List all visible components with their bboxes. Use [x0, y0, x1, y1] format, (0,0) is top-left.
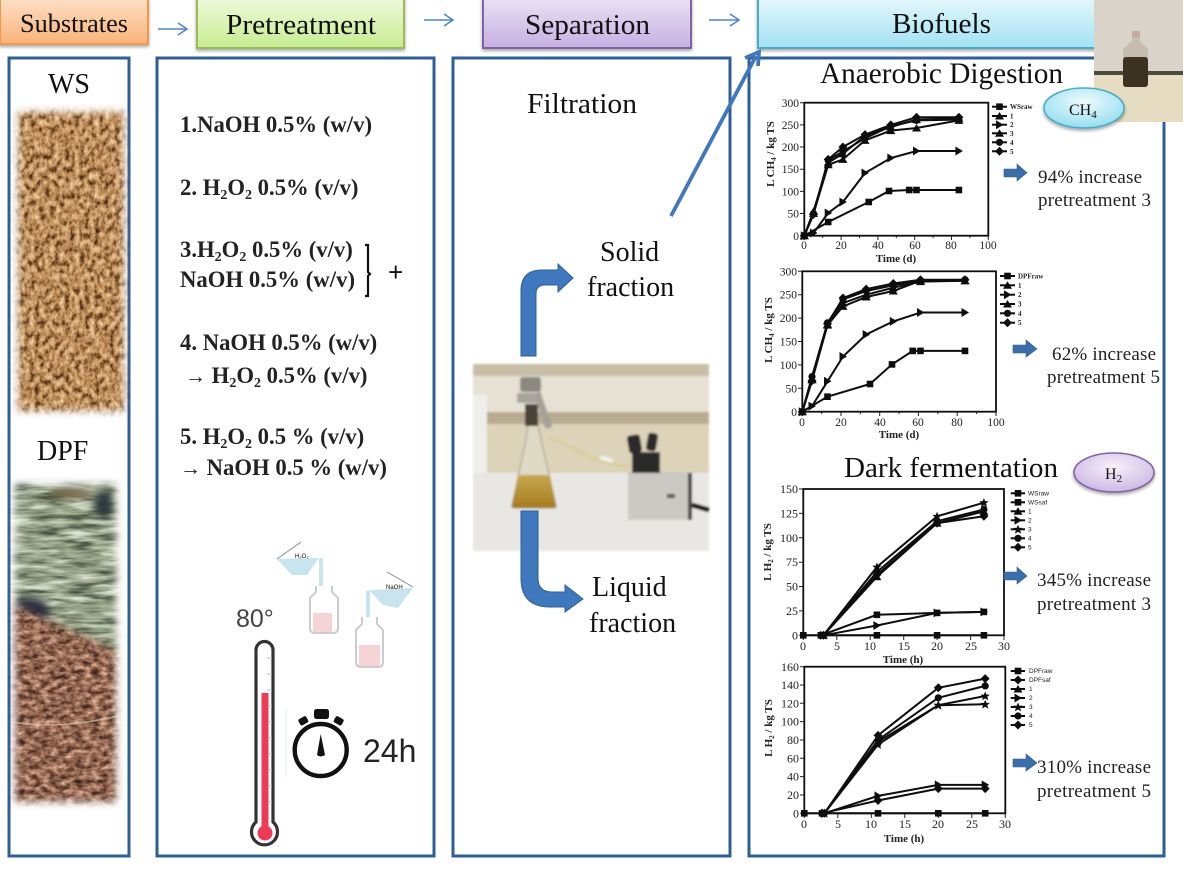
icon: beaker pouring H2O2	[277, 542, 338, 633]
callout: 94% increase	[1038, 167, 1151, 211]
chart: methane from DPF: 200	[780, 313, 797, 325]
chart: methane from WS: Time (d)	[876, 253, 917, 265]
icon: stopwatch	[286, 708, 347, 777]
chart: hydrogen from WS: 1	[1028, 508, 1032, 516]
arrow: callout 2	[1013, 340, 1037, 357]
header: Separation	[483, 0, 691, 48]
chart: methane from DPF: / kg TS	[763, 297, 775, 333]
arrow: to solid fraction	[521, 264, 573, 356]
pretreatment 3: 0.5% (v/v)	[246, 237, 353, 262]
chart: hydrogen from DPF: L H	[763, 739, 775, 757]
chart: methane from WS: 80	[945, 240, 957, 252]
chart: hydrogen from WS: L H	[762, 563, 774, 581]
header: Biofuels: Biofuels	[892, 9, 991, 40]
callout: 310% increase	[1037, 757, 1151, 802]
chart: hydrogen from WS: 100	[780, 531, 798, 545]
chart: methane from WS: 250	[782, 120, 799, 132]
arrow: callout 1	[1004, 164, 1027, 181]
chart: methane from WS: 4	[1010, 139, 1014, 147]
pretreatment 5: 2	[220, 437, 227, 452]
chart: hydrogen from WS: 125	[780, 506, 798, 520]
pretreatment 2: O	[227, 175, 245, 200]
chart: hydrogen from WS: / kg TS	[762, 523, 774, 559]
chart: methane from WS: 300	[782, 98, 799, 110]
badge: H2	[1074, 453, 1154, 492]
chart: hydrogen from WS: 5	[1028, 544, 1032, 552]
pretreatment 5: 5. H	[180, 424, 220, 449]
chart: hydrogen from WS: 3	[1028, 526, 1032, 534]
chart: hydrogen from WS: 150	[780, 482, 798, 496]
chart: methane from WS: 3	[1010, 130, 1014, 138]
chart: hydrogen from DPF: 2	[1029, 695, 1033, 702]
badge: H2: 2	[1117, 473, 1122, 485]
chart: hydrogen from DPF: 140	[781, 678, 799, 692]
badge: H2: H	[1105, 466, 1117, 483]
pretreatment 4: 2	[229, 376, 236, 391]
chart: hydrogen from DPF: 2	[768, 735, 776, 739]
header: Biofuels	[758, 0, 1103, 48]
pretreatment 2: 2. H	[180, 175, 220, 200]
label: solid fraction	[587, 237, 674, 303]
chart: methane from DPF: 2	[1018, 291, 1022, 299]
chart: methane from DPF: Time (d)	[879, 429, 920, 441]
chart: hydrogen from WS	[762, 482, 1049, 666]
chart: hydrogen from DPF: 10	[865, 817, 877, 831]
chart: hydrogen from DPF: 5	[835, 817, 841, 831]
chart: hydrogen from WS: 2	[767, 559, 775, 563]
photo: wheat straw	[10, 100, 132, 420]
chart: methane from WS: 0	[801, 240, 807, 252]
callout: 62% increase: pretreatment 5	[1047, 367, 1160, 388]
badge: CH4	[1044, 88, 1124, 128]
label: WS: WS	[48, 69, 90, 100]
chart: hydrogen from DPF: 80	[787, 733, 799, 747]
icon: beaker pouring NaOH	[356, 572, 413, 667]
panel: substrates	[8, 58, 132, 856]
heading: dark fermentation: Dark fermentation	[844, 452, 1058, 484]
chart: hydrogen from WS: 10	[864, 639, 876, 653]
chart: methane from DPF: 4	[768, 333, 776, 337]
pretreatment 5	[180, 424, 387, 480]
chart: hydrogen from DPF: DPFraw	[1029, 668, 1053, 675]
chart: hydrogen from DPF: / kg TS	[763, 699, 775, 735]
callout: 94% increase: 94% increase	[1038, 167, 1142, 188]
chart: hydrogen from DPF: Time (h)	[884, 833, 925, 845]
chart: methane from DPF: 4	[1018, 310, 1022, 318]
chart: hydrogen from WS: WSsaf	[1028, 500, 1047, 506]
chart: hydrogen from DPF: 100	[781, 715, 799, 729]
pretreatment 4: 2	[254, 376, 261, 391]
chart: hydrogen from WS: 30	[998, 639, 1010, 653]
badge: CH4: 4	[1091, 109, 1097, 121]
chart: hydrogen from DPF: 5	[1029, 722, 1033, 729]
pretreatment 3: O	[222, 237, 239, 262]
chart: methane from DPF: 0	[791, 407, 797, 419]
chart: hydrogen from DPF: 15	[899, 817, 911, 831]
pretreatment 3: 2	[215, 250, 222, 265]
chart: methane from DPF: 250	[780, 290, 797, 302]
pretreatment 5: 2	[245, 437, 252, 452]
chart: methane from WS	[765, 98, 1034, 265]
panel: separation	[453, 58, 730, 856]
chart: hydrogen from WS: 50	[786, 580, 798, 594]
chart: methane from WS: 150	[782, 164, 799, 176]
pretreatment 3: NaOH 0.5% (w/v)	[180, 267, 355, 292]
header: Separation: Separation	[525, 10, 650, 41]
chart: methane from WS: 4	[770, 157, 778, 161]
chart: methane from DPF: 60	[912, 417, 924, 429]
chart: methane from WS: 0	[793, 231, 799, 243]
chart: hydrogen from DPF: DPFsaf	[1029, 677, 1051, 684]
pretreatment 4: 0.5% (v/v)	[261, 363, 367, 388]
pretreatment 4: 4. NaOH 0.5% (w/v)	[180, 330, 377, 355]
pretreatment 5: 0.5 % (v/v)	[252, 424, 364, 449]
label: liquid fraction: Liquid	[592, 572, 667, 603]
chart: methane from DPF: 20	[835, 417, 847, 429]
chart: hydrogen from WS: 25	[786, 604, 798, 618]
chart: methane from WS: 60	[909, 240, 921, 252]
panel: biofuels	[749, 57, 1164, 856]
pretreatment 2: 2	[245, 188, 252, 203]
chart: methane from DPF: 100	[780, 360, 797, 372]
header: Substrates	[0, 0, 148, 44]
chart: methane from DPF: 50	[786, 383, 797, 395]
arrow: separation to biofuels	[709, 19, 738, 21]
label: solid fraction: Solid	[600, 237, 659, 268]
chart: hydrogen from WS: 0	[792, 628, 798, 642]
chart: methane from WS: / kg TS	[765, 121, 777, 157]
badge: CH4: CH	[1069, 102, 1091, 119]
label: duration: 24h	[363, 733, 416, 769]
chart: hydrogen from DPF: 4	[1029, 713, 1033, 720]
icon: thermometer	[251, 642, 277, 845]
pretreatment 5: → NaOH 0.5 % (w/v)	[180, 455, 387, 480]
chart: hydrogen from WS: 0	[800, 639, 806, 653]
pretreatment 1: 1.NaOH 0.5% (w/v)	[180, 112, 372, 137]
callout: 94% increase: pretreatment 3	[1038, 190, 1151, 211]
chart: methane from DPF: 100	[987, 417, 1005, 429]
chart: hydrogen from WS: 5	[834, 639, 840, 653]
panel: pretreatment	[157, 58, 434, 856]
chart: methane from DPF: 40	[874, 417, 886, 429]
chart: methane from DPF: 3	[1018, 300, 1022, 308]
callout: 62% increase	[1047, 344, 1160, 388]
pretreatment 5: O	[227, 424, 245, 449]
chart: methane from WS: 100	[782, 186, 799, 198]
arrow: substrates to pretreatment	[158, 28, 186, 30]
chart: hydrogen from DPF: 25	[966, 817, 978, 831]
chart: hydrogen from DPF: 40	[787, 770, 799, 784]
pretreatment 2: 2	[220, 188, 227, 203]
arrow: to liquid fraction	[521, 511, 583, 612]
pretreatment 3: 2	[239, 250, 246, 265]
chart: hydrogen from WS: 2	[1028, 518, 1032, 524]
label: filtration: Filtration	[527, 89, 637, 120]
callout: 62% increase: 62% increase	[1052, 344, 1156, 365]
callout: 310% increase: pretreatment 5	[1037, 781, 1151, 802]
chart: hydrogen from DPF: 0	[793, 806, 799, 820]
pretreatment 3: 3.H	[180, 237, 215, 262]
label: liquid fraction: fraction	[589, 608, 676, 639]
chart: methane from DPF: 5	[1018, 319, 1022, 327]
chart: hydrogen from DPF: 1	[1029, 686, 1033, 693]
header: Pretreatment: Pretreatment	[226, 10, 376, 41]
header: Pretreatment	[197, 0, 404, 48]
pretreatment 4	[180, 330, 377, 391]
chart: hydrogen from WS: 25	[965, 639, 977, 653]
chart: hydrogen from WS: 75	[786, 555, 798, 569]
chart: hydrogen from DPF: 0	[801, 817, 807, 831]
chart: hydrogen from WS: 4	[1028, 536, 1032, 542]
label: temperature: 80°	[236, 605, 274, 633]
chart: methane from DPF: 150	[780, 336, 797, 348]
chart: methane from DPF: 1	[1018, 282, 1022, 290]
chart: hydrogen from DPF: 120	[781, 696, 799, 710]
chart: methane from WS: 100	[979, 240, 997, 252]
chart: methane from WS: WSraw	[1010, 103, 1034, 111]
icon: beaker pouring NaOH: NaOH	[386, 585, 403, 591]
chart: methane from DPF	[763, 266, 1044, 441]
chart: hydrogen from DPF	[763, 660, 1053, 845]
label: liquid fraction	[589, 572, 676, 639]
callout: 310% increase: 310% increase	[1037, 757, 1151, 778]
header: Substrates: Substrates	[20, 9, 128, 38]
chart: hydrogen from WS: 15	[898, 639, 910, 653]
callout: 345% increase: 345% increase	[1037, 570, 1151, 591]
heading: anaerobic digestion: Anaerobic Digestion	[820, 57, 1063, 90]
icon: beaker pouring H2O2: H₂O₂	[295, 554, 309, 560]
chart: hydrogen from WS: WSraw	[1028, 490, 1049, 498]
arrow: solid fraction to biofuels	[671, 52, 759, 216]
pretreatment 4: → H	[185, 363, 229, 388]
chart: methane from DPF: 300	[780, 266, 797, 278]
photo: biofuel bottle	[1094, 0, 1183, 122]
chart: hydrogen from DPF: 30	[999, 817, 1011, 831]
chart: hydrogen from WS: Time (h)	[883, 654, 924, 666]
arrow: callout 3	[1004, 567, 1027, 584]
callout: 345% increase	[1037, 570, 1151, 615]
label: DPF: DPF	[37, 436, 88, 467]
arrow: callout 4	[1013, 754, 1037, 771]
chart: methane from DPF: 0	[799, 417, 805, 429]
photo: date palm fronds	[8, 475, 130, 815]
pretreatment 4: O	[236, 363, 254, 388]
chart: hydrogen from DPF: 60	[787, 751, 799, 765]
pretreatment 3	[180, 237, 403, 296]
chart: methane from DPF: 80	[951, 417, 963, 429]
chart: methane from WS: 200	[782, 142, 799, 154]
callout: 345% increase: pretreatment 3	[1037, 594, 1151, 615]
chart: methane from WS: 50	[788, 208, 799, 220]
pretreatment 3: +	[388, 257, 403, 287]
chart: methane from WS: L CH	[765, 161, 777, 187]
arrow: pretreatment to separation	[424, 19, 452, 21]
chart: methane from DPF: L CH	[763, 337, 775, 363]
pretreatment 2: 0.5% (v/v)	[252, 175, 358, 200]
chart: hydrogen from DPF: 20	[932, 817, 944, 831]
chart: hydrogen from DPF: 20	[787, 788, 799, 802]
chart: methane from WS: 2	[1010, 121, 1014, 129]
chart: hydrogen from DPF: 160	[781, 660, 799, 674]
label: solid fraction: fraction	[587, 272, 674, 303]
chart: methane from WS: 40	[872, 240, 884, 252]
photo: vacuum filtration setup	[473, 364, 709, 551]
chart: methane from DPF: DPFraw	[1018, 272, 1044, 280]
chart: methane from WS: 1	[1010, 112, 1014, 120]
chart: hydrogen from WS: 20	[931, 639, 943, 653]
chart: hydrogen from DPF: 3	[1029, 704, 1033, 711]
chart: methane from WS: 5	[1010, 148, 1014, 156]
chart: methane from WS: 20	[835, 240, 847, 252]
